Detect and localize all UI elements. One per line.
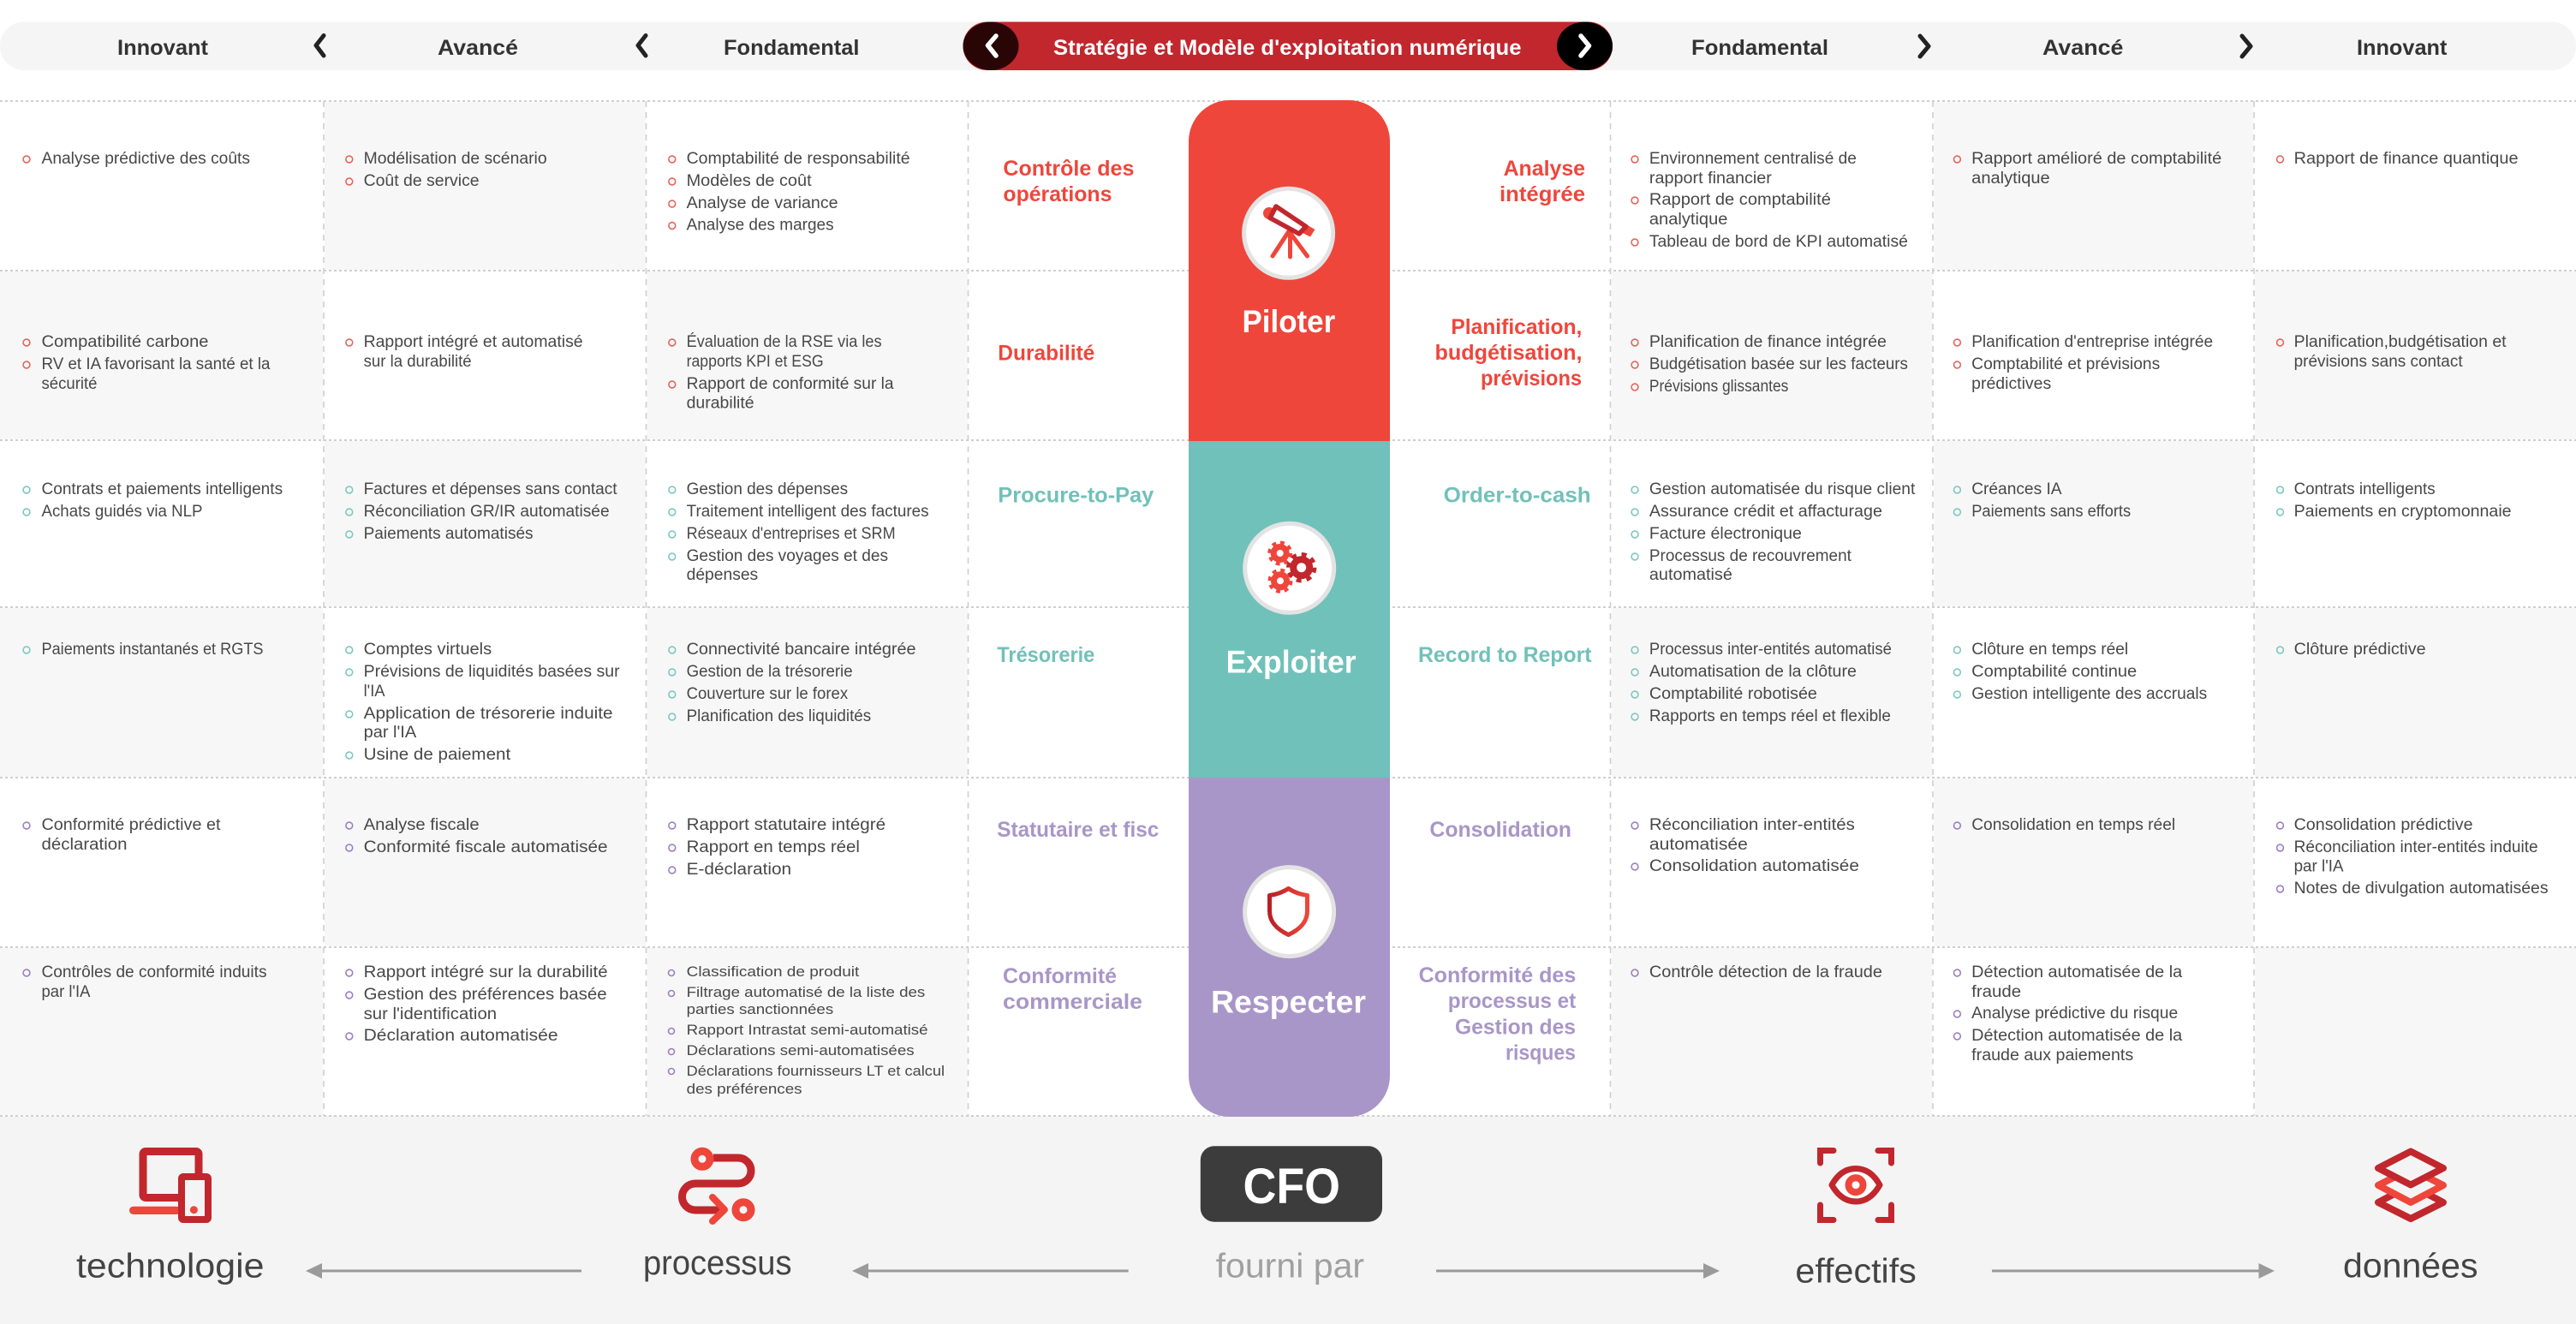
chevron left 2 [638,36,646,56]
cell: Consolidation / Fondamental: Consolidation automatisée [1649,857,1859,875]
cell: Procure-to-Pay / Fondamental: Gestion des voyages et des [687,547,888,565]
icon: devices [129,1151,208,1220]
footer: processus [643,1151,791,1282]
cell: Contrôle des opérations / Fondamental [669,150,910,235]
cell: Procure-to-Pay / Avancé [346,480,617,543]
label: Conformité des processus et Gestion des risques: Conformité des [1419,963,1576,987]
cell: Record to Report / Innovant: Clôture prédictive [2294,641,2426,659]
label: Planification, budgétisation, prévisions: Planification, [1451,315,1582,339]
cell: Contrôle des opérations / Fondamental: Comptabilité de responsabilité [687,150,910,168]
cell: Record to Report / Avancé [1954,641,2207,703]
label: Conformité des processus et Gestion des risques: Gestion des [1455,1016,1576,1040]
cell: Planification / Innovant [2277,333,2507,371]
pillar heading: Exploiter: Exploiter [1226,644,1357,680]
icon: process flow [682,1151,751,1221]
cell: Planification / Innovant: Planification,budgétisation et [2294,333,2507,351]
cell: Statutaire et fisc / Fondamental: Rapport statutaire intégré [687,816,886,834]
cell: Trésorerie / Avancé: Comptes virtuels [364,641,492,659]
icon: telescope [1244,188,1333,277]
header: Avancé right: Avancé [2042,36,2124,60]
cell: Conformité commerciale / Fondamental: parties sanctionnées [687,1001,833,1017]
cell: Durabilité / Innovant: sécurité [41,375,98,393]
cell: Statutaire et fisc / Fondamental [669,816,886,879]
cell: Trésorerie / Fondamental: Gestion de la trésorerie [687,663,853,681]
cell: Durabilité / Fondamental: rapports KPI et ESG [687,353,824,371]
cell: Record to Report / Fondamental [1631,641,1892,725]
header bar [0,22,2576,70]
cell: Procure-to-Pay / Fondamental: dépenses [687,566,758,584]
cell: Conformité commerciale / Fondamental: Déclarations fournisseurs LT et calcul [687,1063,945,1079]
pillar: Piloter [1189,100,1390,441]
central pillar [1189,100,1390,1117]
cell: Procure-to-Pay / Avancé: Réconciliation GR/IR automatisée [364,503,610,521]
cell: Record to Report / Fondamental: Processus inter-entités automatisé [1649,641,1892,659]
cell: Order-to-cash / Avancé: Créances IA [1971,480,2062,498]
cell: Statutaire et fisc / Avancé: Conformité fiscale automatisée [364,838,608,856]
chevron right 1 [1920,36,1929,57]
pillar heading: Piloter: Piloter [1242,304,1335,339]
cell: Contrôle des opérations / Fondamental: Analyse des marges [687,216,834,235]
cell: Durabilité / Avancé [346,333,583,371]
cell: Conformité commerciale / Fondamental [668,963,945,1097]
icon: shield [1245,868,1334,957]
cell: Trésorerie / Innovant: Paiements instantanés et RGTS [41,641,264,659]
cell: Trésorerie / Avancé: Usine de paiement [364,746,511,764]
cell: Record to Report / Avancé: Gestion intelligente des accruals [1971,685,2207,703]
cell: Consolidation / Fondamental: automatisée [1649,836,1748,854]
label: Contrôle des opérations: opérations [1003,182,1112,206]
cell: Contrôle des opérations / Innovant: Analyse prédictive des coûts [41,150,250,168]
cell: Planification / Fondamental: Budgétisation basée sur les facteurs [1649,355,1908,373]
cell: Contrôle des opérations / Avancé: Modélisation de scénario [364,150,547,168]
label: Durabilité: Durabilité [998,342,1094,366]
cell: Conformité des processus / Avancé: Détection automatisée de la [1971,963,2183,981]
cell: Statutaire et fisc / Avancé [346,816,608,856]
pillar: Exploiter [1189,441,1390,778]
label: Conformité commerciale: commerciale [1003,990,1142,1014]
chevron right 2 [2242,36,2251,57]
CFO badge [1201,1146,1382,1222]
cell: Consolidation / Avancé: Consolidation en temps réel [1971,816,2175,834]
cell: Planification / Avancé [1954,333,2213,393]
cell: Conformité commerciale / Avancé: Déclaration automatisée [364,1027,558,1045]
cell: Order-to-cash / Innovant [2277,480,2512,521]
cell: Procure-to-Pay / Innovant [23,480,283,521]
cell: Order-to-cash / Innovant: Paiements en cryptomonnaie [2294,503,2512,521]
icon: gears [1245,523,1334,612]
cell: Planification / Avancé: Planification d'entreprise intégrée [1971,333,2213,351]
left banner chevron [988,36,996,56]
cell: Record to Report / Avancé: Clôture en temps réel [1971,641,2128,659]
label: processus: processus [643,1244,791,1282]
header: Innovant right: Innovant [2357,36,2448,60]
footer: données [2343,1151,2478,1285]
cell: Procure-to-Pay / Fondamental: Gestion des dépenses [687,480,848,498]
cell: Record to Report / Fondamental: Rapports en temps réel et flexible [1649,707,1891,725]
cell: Conformité des processus / Avancé: Détection automatisée de la [1971,1027,2183,1045]
cell: Planification / Fondamental: Planification de finance intégrée [1649,333,1887,351]
cell: Durabilité / Fondamental: durabilité [687,394,754,413]
cell: Order-to-cash / Fondamental: automatisé [1649,566,1732,584]
cell: Conformité commerciale / Fondamental: Rapport Intrastat semi-automatisé [687,1022,928,1038]
title text: Stratégie et Modèle d'exploitation numérique [1053,36,1522,60]
cell: Order-to-cash / Avancé [1954,480,2131,521]
cell: Planification / Fondamental [1631,333,1908,396]
cell: Planification / Avancé: Comptabilité et prévisions [1971,355,2160,373]
cell: Conformité commerciale / Avancé [346,963,608,1045]
cell: Record to Report / Fondamental: Comptabilité robotisée [1649,685,1817,703]
cell: Trésorerie / Fondamental [669,641,916,725]
cell: Contrôle des opérations / Avancé: Coût de service [364,172,480,190]
cell: Durabilité / Innovant: Compatibilité carbone [41,333,209,351]
header: Avancé left: Avancé [438,36,518,60]
cell: Analyse intégrée / Fondamental [1631,150,1908,251]
cell: Trésorerie / Fondamental: Couverture sur le forex [687,685,849,703]
header: Fondamental left: Fondamental [724,36,860,60]
arrow: effectifs to données [1992,1263,2275,1279]
left banner cap [963,22,1019,70]
cell: Trésorerie / Avancé: Prévisions de liquidités basées sur [364,663,620,681]
cell: Durabilité / Fondamental [669,333,894,413]
arrow: fourni par to effectifs [1436,1263,1720,1279]
cell: Statutaire et fisc / Innovant: déclaration [41,836,127,854]
label: fourni par: fourni par [1216,1248,1364,1285]
cell: Durabilité / Innovant [23,333,271,393]
label: technologie: technologie [76,1248,264,1285]
cell: Record to Report / Avancé: Comptabilité continue [1971,663,2137,681]
label: Analyse intégrée: Analyse [1504,157,1585,181]
cell: Statutaire et fisc / Avancé: Analyse fiscale [364,816,480,834]
cell: Planification / Fondamental: Prévisions glissantes [1649,378,1788,396]
cell: Order-to-cash / Fondamental [1631,480,1916,584]
cell: Conformité des processus / Avancé: Analyse prédictive du risque [1971,1005,2178,1023]
cell: Durabilité / Fondamental: Rapport de conformité sur la [687,375,894,393]
cell: Statutaire et fisc / Fondamental: Rapport en temps réel [687,838,860,856]
label: Planification, budgétisation, prévisions: prévisions [1481,367,1582,391]
cell: Consolidation / Innovant: par l'IA [2294,858,2344,875]
cell: Procure-to-Pay / Avancé: Factures et dépenses sans contact [364,480,617,498]
cell: Planification / Innovant: prévisions sans contact [2294,353,2463,371]
cell: Statutaire et fisc / Fondamental: E-déclaration [687,861,791,879]
cell: Durabilité / Avancé: sur la durabilité [364,353,472,371]
cell: Consolidation / Innovant: Consolidation prédictive [2294,816,2473,834]
pillar heading: Respecter: Respecter [1211,985,1366,1019]
title banner [963,22,1613,70]
cell: Analyse intégrée / Avancé [1954,150,2221,188]
label: Planification, budgétisation, prévisions: budgétisation, [1435,341,1583,365]
label: Statutaire et fisc: Statutaire et fisc [997,818,1159,842]
cell: Analyse intégrée / Fondamental: Rapport de comptabilité [1649,191,1831,209]
cell: Trésorerie / Avancé: l'IA [364,683,385,701]
cell: Procure-to-Pay / Fondamental [669,480,929,584]
cell: Contrôle des opérations / Avancé [346,150,547,190]
cell: Procure-to-Pay / Innovant: Achats guidés via NLP [41,503,202,521]
cell: Procure-to-Pay / Avancé: Paiements automatisés [364,525,534,543]
cell: Conformité commerciale / Avancé: Rapport intégré sur la durabilité [364,963,608,981]
cell: Trésorerie / Avancé: par l'IA [364,724,417,742]
arrow: fourni par to processus [852,1263,1129,1279]
cell: Order-to-cash / Fondamental: Gestion automatisée du risque client [1649,480,1916,498]
right banner cap [1557,22,1613,70]
cell: Conformité commerciale / Innovant [23,963,266,1001]
cell: Conformité commerciale / Fondamental: Déclarations semi-automatisées [687,1042,915,1059]
label: données: données [2343,1248,2478,1285]
cell: Procure-to-Pay / Fondamental: Traitement intelligent des factures [687,503,929,521]
chevron left 1 [316,36,324,56]
cell: Contrôle des opérations / Fondamental: Analyse de variance [687,194,838,212]
cell: Order-to-cash / Fondamental: Processus de recouvrement [1649,547,1852,565]
cell: Order-to-cash / Fondamental: Facture électronique [1649,525,1802,543]
cell: Analyse intégrée / Avancé: Rapport amélioré de comptabilité [1971,150,2221,168]
arrow: processus to technologie [306,1263,581,1279]
cell: Record to Report / Fondamental: Automatisation de la clôture [1649,663,1857,681]
cell: Durabilité / Innovant: RV et IA favorisant la santé et la [41,355,271,373]
cell: Trésorerie / Fondamental: Planification des liquidités [687,707,871,725]
cell: Conformité commerciale / Fondamental: Classification de produit [687,963,860,980]
label: Conformité commerciale: Conformité [1003,964,1117,988]
label: Conformité des processus et Gestion des risques: risques [1506,1041,1576,1065]
cell: Statutaire et fisc / Innovant: Conformité prédictive et [41,816,221,834]
icon: layers [2378,1151,2443,1219]
cell: Procure-to-Pay / Innovant: Contrats et paiements intelligents [41,480,283,498]
label: effectifs: effectifs [1795,1252,1917,1290]
cell: Durabilité / Fondamental: Évaluation de la RSE via les [687,333,882,351]
label: Procure-to-Pay: Procure-to-Pay [998,483,1154,507]
right banner chevron [1581,36,1589,56]
cell: Trésorerie / Avancé: Application de trésorerie induite [364,705,613,723]
label: Contrôle des opérations: Contrôle des [1003,157,1134,181]
footer: CFO [1201,1146,1382,1285]
cell: Procure-to-Pay / Fondamental: Réseaux d'entreprises et SRM [687,525,896,543]
cell: Analyse intégrée / Fondamental: Tableau de bord de KPI automatisé [1649,233,1908,251]
icon: eye [1821,1151,1891,1220]
cell: Trésorerie / Fondamental: Connectivité bancaire intégrée [687,641,916,659]
footer: effectifs [1795,1151,1917,1290]
cell: Order-to-cash / Avancé: Paiements sans efforts [1971,503,2131,521]
cell: Conformité des processus / Avancé: fraude aux paiements [1971,1047,2133,1065]
cell: Consolidation / Innovant: Réconciliation inter-entités induite [2294,838,2538,856]
label: Consolidation: Consolidation [1429,818,1571,842]
cell: Conformité commerciale / Fondamental: des préférences [687,1081,802,1097]
cell: Durabilité / Avancé: Rapport intégré et automatisé [364,333,583,351]
label: Record to Report: Record to Report [1418,643,1592,667]
cell: Consolidation / Innovant: Notes de divulgation automatisées [2294,880,2549,898]
cell: Conformité commerciale / Innovant: Contrôles de conformité induits [41,963,267,981]
cell: Consolidation / Fondamental: Réconciliation inter-entités [1649,816,1855,834]
cell: Analyse intégrée / Avancé: analytique [1971,170,2050,188]
cell: Conformité des processus / Fondamental: Contrôle détection de la fraude [1649,963,1882,981]
cell: Trésorerie / Avancé [346,641,620,764]
label: Analyse intégrée: intégrée [1500,182,1585,206]
footer: technologie [76,1151,264,1285]
cell: Order-to-cash / Fondamental: Assurance crédit et affacturage [1649,503,1882,521]
cell: Conformité des processus / Avancé [1954,963,2183,1065]
cell: Analyse intégrée / Fondamental: analytique [1649,211,1727,229]
cell: Statutaire et fisc / Innovant [23,816,221,854]
cell: Conformité commerciale / Avancé: Gestion des préférences basée [364,986,607,1004]
cell: Order-to-cash / Innovant: Contrats intelligents [2294,480,2436,498]
cell: Contrôle des opérations / Fondamental: Modèles de coût [687,172,812,190]
cell: Conformité commerciale / Innovant: par l'IA [41,983,91,1001]
CFO text: CFO [1243,1159,1340,1214]
label: Order-to-cash: Order-to-cash [1444,483,1591,507]
cell: Analyse intégrée / Innovant: Rapport de finance quantique [2294,150,2519,168]
cell: Conformité commerciale / Fondamental: Filtrage automatisé de la liste des [687,984,925,1000]
cell: Analyse intégrée / Fondamental: Environnement centralisé de [1649,150,1857,168]
header: Innovant left: Innovant [117,36,209,60]
cell: Conformité commerciale / Avancé: sur l'identification [364,1005,497,1023]
cell: Planification / Avancé: prédictives [1971,375,2051,393]
cell: Conformité des processus / Avancé: fraude [1971,983,2021,1001]
header: Fondamental right: Fondamental [1691,36,1828,60]
label: Conformité des processus et Gestion des risques: processus et [1448,989,1577,1013]
pillar: Respecter [1189,778,1390,1117]
cell: Consolidation / Fondamental [1631,816,1859,875]
cell: Analyse intégrée / Fondamental: rapport financier [1649,170,1773,188]
label: Trésorerie: Trésorerie [997,643,1094,667]
cell: Consolidation / Innovant [2277,816,2549,898]
